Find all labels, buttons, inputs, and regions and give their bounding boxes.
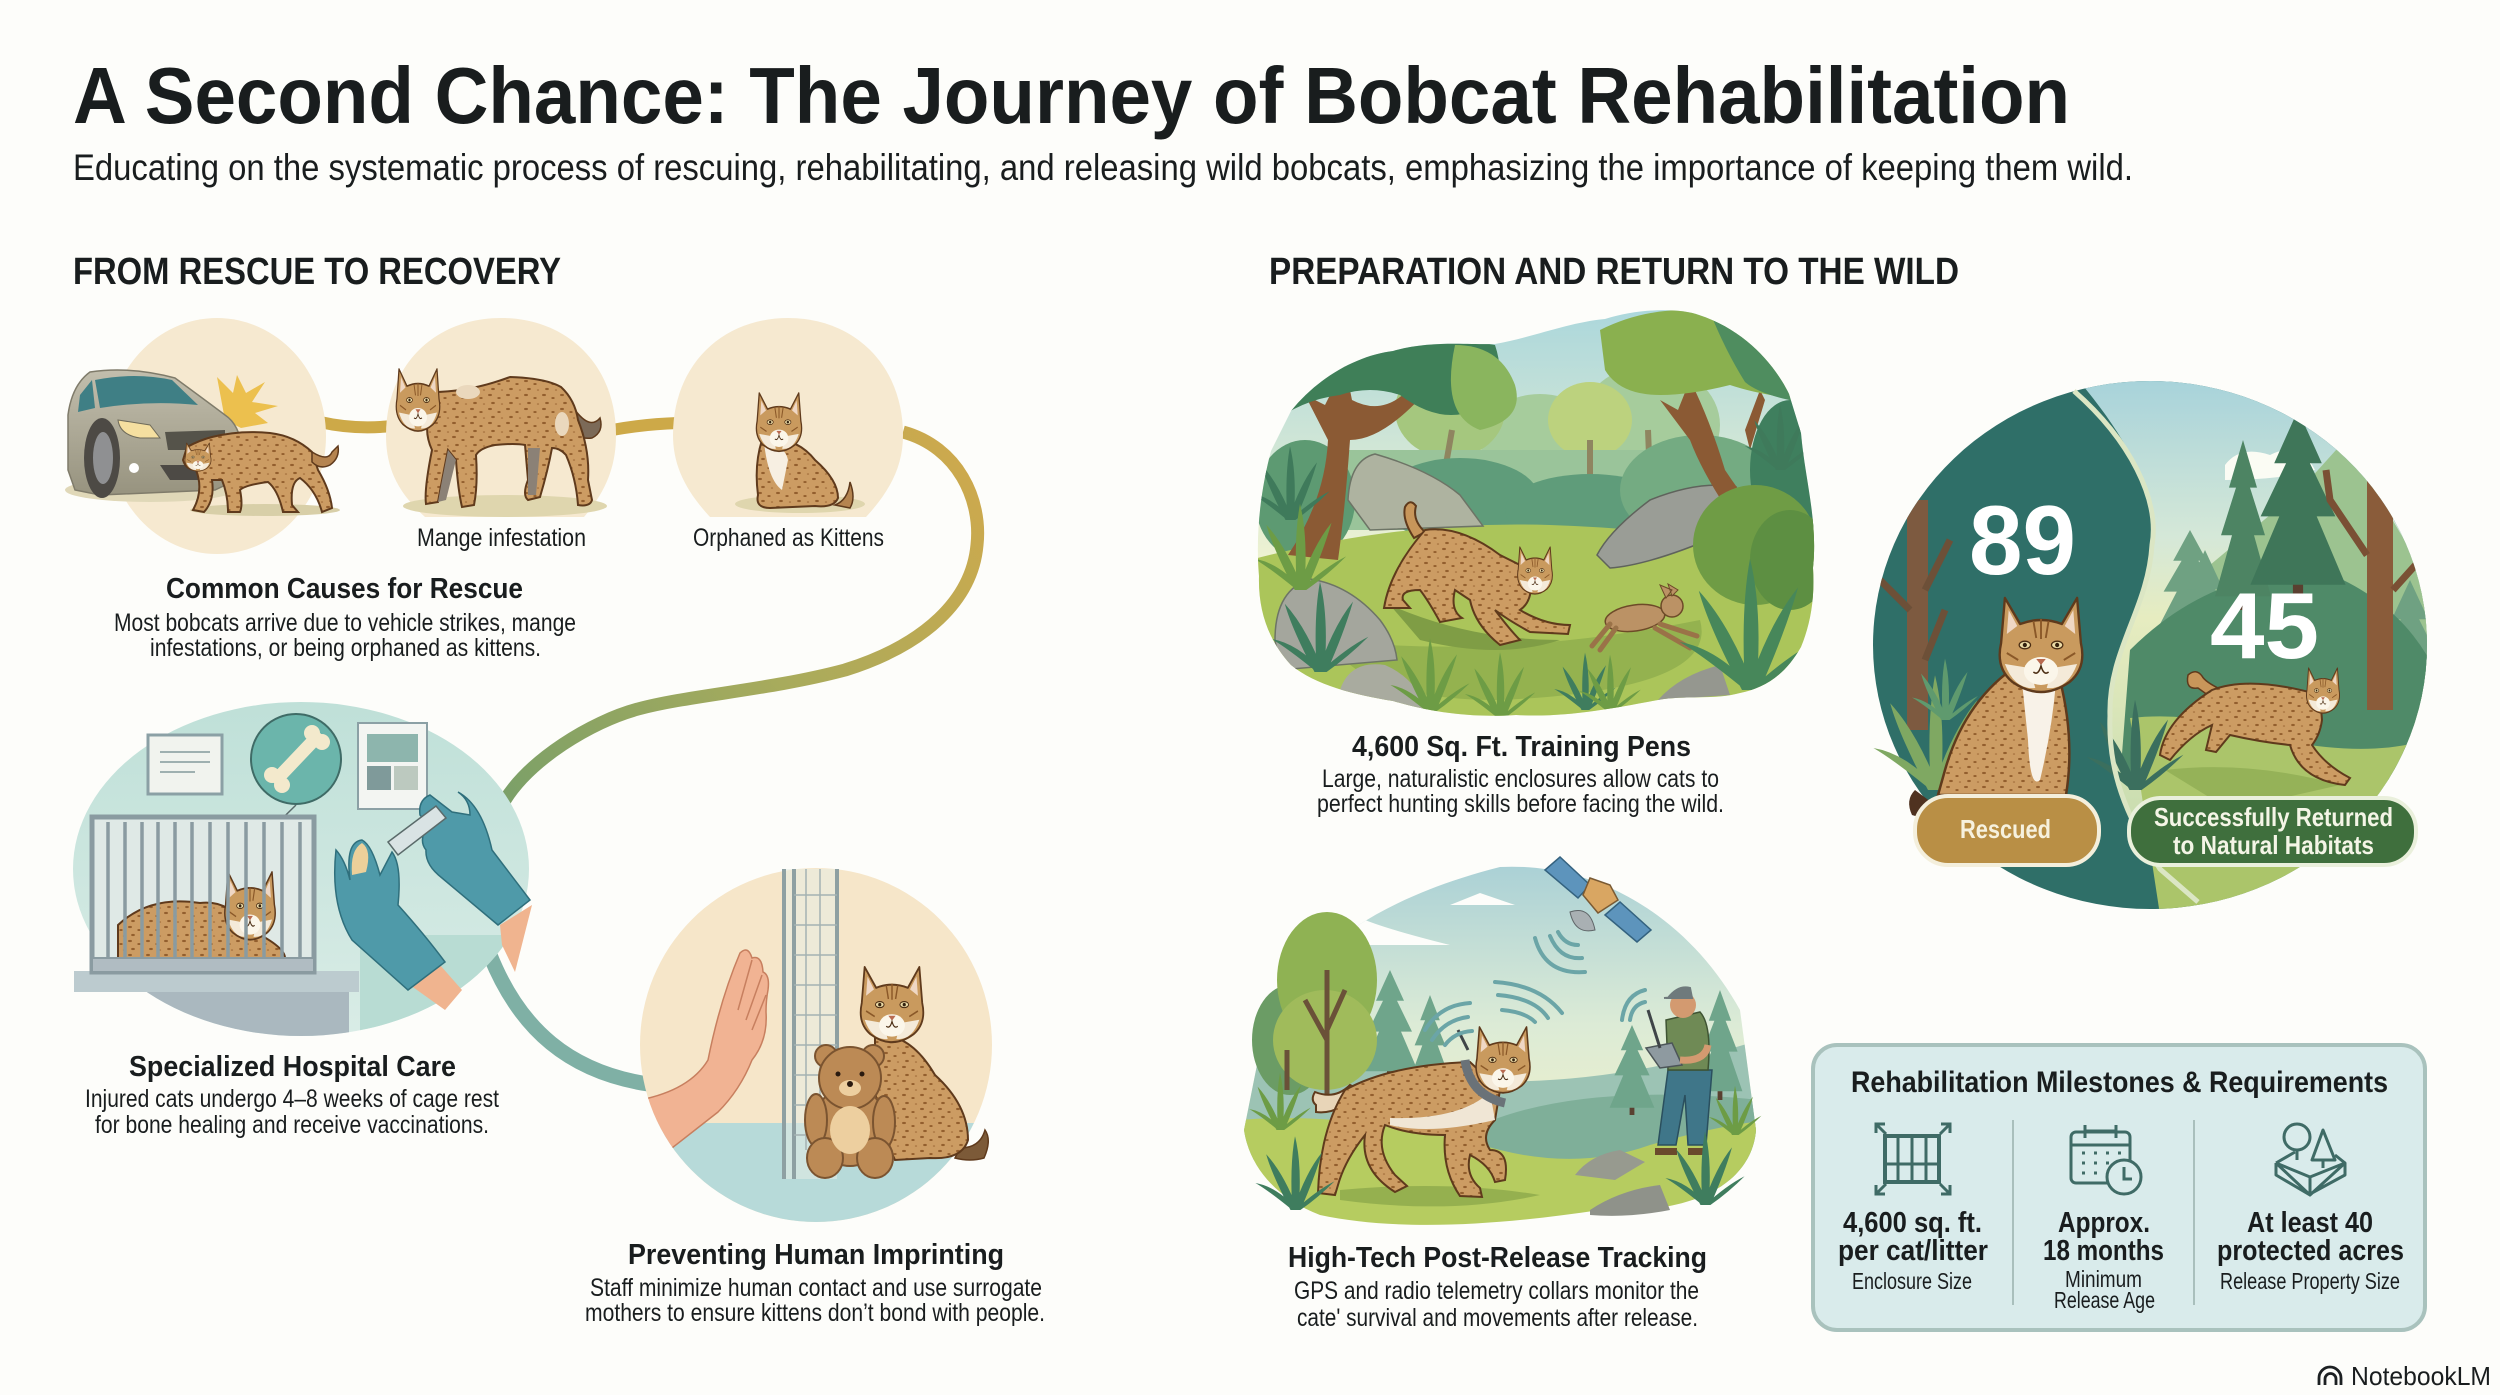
value: enclosure size: 4,600 sq. ft. [1843, 1207, 1982, 1239]
pill: successfully returned: Successfully Returned [2154, 802, 2393, 832]
stat: 45: 45 [2210, 573, 2319, 678]
teddy bear [805, 1045, 895, 1178]
text block: specialized hospital care: Specialized Hospital Care [129, 1051, 456, 1083]
text block: training pens: 4,600 Sq. Ft. Training Pens [1352, 731, 1691, 763]
bobcat with mange [396, 369, 601, 507]
hand [648, 949, 770, 1148]
right shrubs [1693, 485, 1817, 605]
bobcat stalking [1384, 502, 1570, 645]
icon: calendar [2071, 1125, 2141, 1194]
panel: preventing imprinting scene [630, 868, 1000, 1233]
logo: NotebookLM: NotebookLM [2351, 1361, 2491, 1391]
icon: satellite [1545, 857, 1651, 942]
grass tufts [1272, 582, 1616, 710]
rocks and foreground grass [1249, 1073, 1761, 1216]
mesh fence [784, 869, 837, 1179]
panel: post-release tracking scene [1240, 857, 1770, 1240]
panel: mange infestation circle [386, 318, 616, 517]
distant trees [1348, 376, 1720, 530]
pill: successfully returned: to Natural Habitats [2173, 830, 2374, 860]
value: release age [2043, 1207, 2164, 1313]
text block: training pens: Large, naturalistic enclosures allow cats to [1322, 765, 1719, 793]
title: A Second Chance: The Journey of Bobcat Rehabilitation [73, 51, 2070, 140]
text block: preventing human imprinting: Preventing Human Imprinting [628, 1239, 1004, 1271]
value: property size: At least 40 [2247, 1207, 2373, 1239]
bobcat with GPS collar [1313, 1027, 1530, 1197]
right tree [1660, 392, 1765, 496]
icon: car [68, 370, 242, 498]
text block: preventing human imprinting: Staff minimize human contact and use surrogate [590, 1274, 1042, 1302]
kitten [756, 393, 853, 508]
value: enclosure size: per cat/litter [1838, 1235, 1988, 1267]
text block: post-release tracking [1288, 1242, 1707, 1332]
card heading: Rehabilitation Milestones & Requirements [1851, 1066, 2388, 1099]
label: orphaned as kittens: Orphaned as Kittens [693, 524, 884, 552]
heading: preparation and return to the wild: PREPARATION AND RETURN TO THE WILD [1269, 251, 1959, 293]
ground [1244, 1118, 1756, 1225]
text block: post-release tracking: cate' survival and movements after release. [1297, 1304, 1698, 1332]
text block: specialized hospital care: for bone healing and receive vaccinations. [95, 1111, 489, 1139]
value: release age: 18 months [2043, 1235, 2164, 1267]
pill: rescued: Rescued [1960, 814, 2051, 844]
value: release age: Release Age [2054, 1287, 2155, 1313]
panel: vehicle strike circle [65, 318, 340, 554]
table [147, 992, 349, 1036]
right rock [1597, 485, 1736, 568]
panel: training pen forest scene [1250, 300, 1830, 730]
shadow [65, 478, 235, 502]
icon: bandaged bone [245, 714, 341, 855]
running bobcat [2160, 668, 2350, 785]
certificate on wall [148, 735, 222, 794]
value: enclosure size [1838, 1207, 1988, 1294]
text block: training pens: perfect hunting skills before facing the wild. [1317, 790, 1724, 818]
radio signal waves [1425, 932, 1645, 1045]
panel: orphaned kitten circle [673, 318, 903, 517]
text block: post-release tracking: High-Tech Post-Release Tracking [1288, 1242, 1707, 1274]
gloved hands with syringe [335, 792, 532, 1010]
text block: specialized hospital care [85, 1051, 499, 1139]
journey connector path [320, 422, 978, 1084]
icon: enclosure [1876, 1124, 1950, 1194]
meadow ground [1258, 524, 1814, 716]
text block: common causes for rescue: Most bobcats arrive due to vehicle strikes, mange [114, 609, 576, 637]
x-ray poster [358, 723, 427, 809]
value: property size: Release Property Size [2220, 1268, 2400, 1294]
value: property size [2217, 1207, 2404, 1294]
value: property size: protected acres [2217, 1235, 2404, 1267]
left tree and foliage [1880, 500, 1950, 730]
kitten bobcat [861, 967, 988, 1160]
icon: impact starburst [217, 375, 278, 428]
value: release age: Minimum [2065, 1266, 2142, 1292]
foreground left rock [1275, 579, 1397, 670]
seated bobcat [1909, 598, 2082, 816]
heading: from rescue to recovery: FROM RESCUE TO RECOVERY [73, 251, 561, 293]
curved divider [2074, 391, 2198, 902]
returned scene half [2085, 381, 2427, 909]
rabbit [1592, 584, 1697, 650]
text block: preventing human imprinting: mothers to ensure kittens don’t bond with people. [585, 1299, 1045, 1327]
bobcat hit by car [183, 432, 340, 516]
upper-left rock [1348, 454, 1483, 530]
pill: rescued [1915, 796, 2099, 865]
panel: rescued vs returned statistic [1873, 375, 2446, 915]
text block: training pens [1317, 731, 1724, 818]
value: enclosure size: Enclosure Size [1852, 1268, 1972, 1294]
trees [1252, 912, 1377, 1095]
text block: preventing human imprinting [585, 1239, 1045, 1327]
panel: milestones and requirements card [1813, 1045, 2425, 1330]
value: release age: Approx. [2058, 1207, 2150, 1239]
subtitle: Educating on the systematic process of rescuing, rehabilitating, and releasing wild bobcats, emphasizing the importance of keeping them wild. [73, 147, 2133, 188]
pill: successfully returned [2129, 798, 2416, 865]
text block: specialized hospital care: Injured cats undergo 4–8 weeks of cage rest [85, 1085, 499, 1113]
left tree [1288, 366, 1414, 560]
text block: post-release tracking: GPS and radio telemetry collars monitor the [1294, 1277, 1699, 1305]
field researcher [1646, 987, 1712, 1155]
mid bushes [1255, 400, 1830, 560]
text block: common causes for rescue: Common Causes for Rescue [166, 573, 523, 605]
text block: common causes for rescue: infestations, or being orphaned as kittens. [150, 634, 541, 662]
icon: protected land [2276, 1124, 2345, 1195]
panel: hospital care scene [73, 702, 540, 1045]
stat: 89: 89 [1969, 485, 2076, 595]
cage with bobcat [92, 817, 314, 972]
text block: common causes for rescue [114, 573, 576, 662]
label: mange infestation: Mange infestation [417, 524, 586, 552]
